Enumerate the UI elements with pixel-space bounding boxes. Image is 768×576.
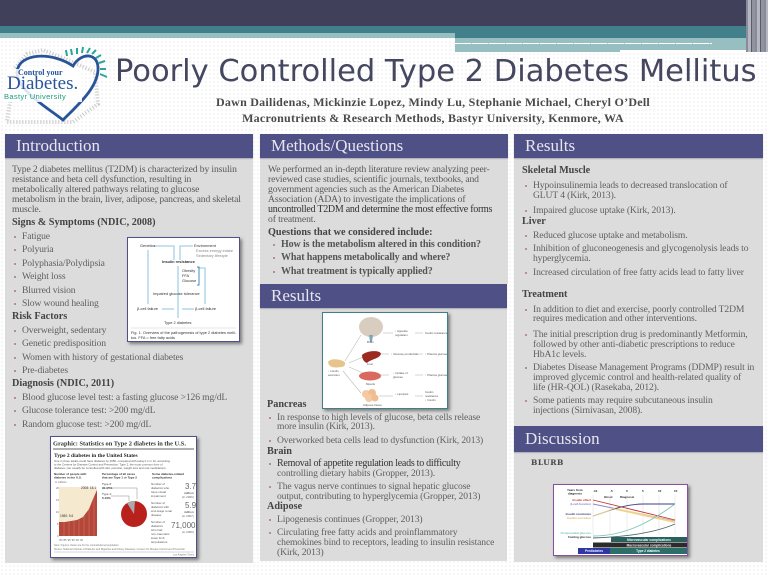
heading: liver: Liver — [522, 216, 546, 227]
list: adipose: Lipogenesis continues (Gropper, 2013) — [277, 514, 422, 525]
methods paragraph: uncontrolled T2DM and determine the most effective forms — [268, 204, 492, 214]
figure: natural history of type 2 diabetes: 0 — [626, 489, 628, 493]
figure: statistics on type 2 diabetes in the U.S.: Number of — [151, 501, 165, 505]
title: Poorly Controlled Type 2 Diabetes Mellitus — [115, 54, 757, 89]
figure: natural history of type 2 diabetes: Insulin resistance — [566, 512, 591, 516]
figure: statistics on type 2 diabetes in the U.S.: Los Angeles Times — [173, 554, 195, 556]
figure: organs affected by insulin deficiency: ↓ Uptake of — [393, 371, 408, 375]
list: questions — [273, 239, 481, 277]
figure: organs affected by insulin deficiency: Insulin resistance — [425, 331, 447, 335]
heading: Introduction: Introduction — [16, 136, 100, 155]
panel: discussion — [514, 426, 763, 562]
figure: organs affected by insulin deficiency: ↑ Lipolysis — [395, 392, 409, 396]
figure: statistics on type 2 diabetes in the U.S. — [50, 436, 197, 558]
figure: pathogenesis of type 2 diabetes — [127, 237, 240, 342]
panel: results (skeletal muscle, liver, treatment) — [514, 134, 763, 426]
figure: natural history of type 2 diabetes — [553, 484, 688, 556]
methods paragraph: reviewed case studies, scientific journals, textbooks, and — [268, 174, 479, 184]
list: questions: How is the metabolism altered in this condition? — [281, 239, 481, 250]
figure: statistics on type 2 diabetes in the U.S.: 10 — [56, 510, 59, 514]
heading: treatment: Treatment — [522, 289, 567, 300]
figure: statistics on type 2 diabetes in the U.S.: amputations — [151, 540, 168, 544]
list: treatment: In addition to diet and exercise, poorly controlled T2DM — [533, 304, 744, 314]
list: adipose: Circulating free fatty acids and proinflammatory — [277, 527, 457, 538]
list: pancreas: Overworked beta cells lead to dysfunction (Kirk, 2013) — [277, 435, 483, 446]
figure: statistics on type 2 diabetes in the U.S.: 90-95% — [102, 486, 113, 490]
figure: statistics on type 2 diabetes in the U.S.: million — [184, 510, 194, 514]
figure: natural history of type 2 diabetes: Diagnosis — [620, 495, 635, 499]
figure: statistics on type 2 diabetes in the U.S.: Type 1: — [102, 492, 112, 496]
intro paragraph: metabolism in the brain, liver, adipose, pancreas, and skeletal — [12, 194, 241, 204]
list: liver: hyperglycemia. — [533, 253, 591, 264]
methods paragraph: We performed an in-depth literature review analyzing peer- — [268, 164, 490, 174]
list: treatment: Diabetes Disease Management Programs (DDMP) result in — [533, 362, 754, 373]
figure: statistics on type 2 diabetes in the U.S.: In millions — [55, 480, 67, 484]
list: brain — [269, 458, 480, 502]
figure: statistics on type 2 diabetes in the U.S.: Graphic: Statistics on Type 2 diabetes in the U.S. — [53, 440, 186, 448]
figure: statistics on type 2 diabetes in the U.S.: diabetes, can usually be controlled with diet, exercise, weight loss and oral medications. — [54, 466, 167, 470]
figure: pathogenesis of type 2 diabetes: Obesity — [182, 268, 195, 273]
list: treatment — [525, 304, 754, 416]
list: risk factors — [14, 325, 183, 376]
figure: statistics on type 2 diabetes in the U.S.: Source: National Institute of Diabetes and Digestive and Kidney Diseases; Centers for Disease Control and Prevention — [54, 548, 186, 551]
list: treatment: life (HR-QOL) (Rasekaba, 2012). — [533, 382, 659, 393]
figure: organs affected by insulin deficiency: glucose — [393, 375, 403, 379]
figure: statistics on type 2 diabetes in the U.S.: 3.7 — [185, 482, 196, 491]
list: adipose: chemokines bind to receptors, leading to insulin resistance — [277, 537, 494, 548]
figure: statistics on type 2 diabetes in the U.S.: One in three adults could have diabetes by 2050, compared with today's 1 in 10, according — [54, 459, 170, 463]
list: risk factors: Women with history of gestational diabetes — [22, 352, 183, 363]
logo: Control your Diabetes heart — [4, 46, 108, 124]
list: skeletal muscle: GLUT 4 (Kirk, 2013). — [533, 190, 616, 201]
figure: organs affected by insulin deficiency: resistance — [425, 394, 439, 398]
figure: natural history of type 2 diabetes: 10 — [658, 489, 662, 493]
figure: statistics on type 2 diabetes in the U.S.: diabetics — [151, 524, 163, 528]
list: symptoms — [14, 231, 105, 309]
list: questions: What happens metabolically and where? — [281, 252, 450, 263]
figure: pathogenesis of type 2 diabetes: Glucose — [182, 278, 196, 283]
figure: statistics on type 2 diabetes in the U.S.: 20 — [56, 486, 59, 490]
figure: organs affected by insulin deficiency: Liver — [367, 362, 373, 366]
figure: organs affected by insulin deficiency: ↓ Insulin — [425, 398, 436, 402]
heading: Introduction — [5, 134, 253, 158]
figure: pathogenesis of type 2 diabetes: Insulin resistance — [162, 259, 196, 264]
figure: organs affected by insulin deficiency: regulation — [395, 333, 408, 337]
list: diagnosis — [14, 392, 227, 430]
figure: statistics on type 2 diabetes in the U.S.: non-traumatic — [151, 532, 170, 536]
list: pancreas: In response to high levels of glucose, beta cells release — [277, 412, 480, 422]
list: risk factors: Overweight, sedentary — [22, 325, 106, 336]
figure: statistics on type 2 diabetes in the U.S.: '80 '85 '90 '95 '00 '05 — [59, 538, 83, 542]
list: symptoms: Slow wound healing — [22, 298, 99, 309]
figure: natural history of type 2 diabetes: Years from — [567, 488, 583, 492]
heading: Discussion — [514, 426, 763, 452]
figure: natural history of type 2 diabetes: Type 2 diabetes — [636, 549, 660, 553]
figure: natural history of type 2 diabetes: 5 — [642, 489, 644, 493]
list: diagnosis: Glucose tolerance test: >200 mg/dL — [22, 405, 155, 416]
intro paragraph: metabolically altered pathways relating to glucose — [12, 184, 199, 194]
list: liver: Reduced glucose uptake and metabolism. — [533, 230, 688, 241]
heading: skeletal muscle: Skeletal Muscle — [522, 165, 590, 176]
logo: Control your Diabetes heart: Bastyr University — [4, 92, 66, 101]
figure: statistics on type 2 diabetes in the U.S.: complications — [152, 476, 173, 480]
list: symptoms: Weight loss — [22, 271, 65, 282]
heading: Discussion: Discussion — [525, 429, 600, 448]
list: diagnosis: Blood glucose level test: a fasting glucose >126 mg/dL — [22, 392, 227, 403]
panel: methods and questions — [260, 134, 508, 284]
figure: statistics on type 2 diabetes in the U.S.: Percentage of all cases — [102, 472, 136, 476]
figure: statistics on type 2 diabetes in the U.S.: 2008: 18.1 — [81, 486, 96, 490]
heading: risk factors: Risk Factors — [12, 311, 67, 322]
list: risk factors: Pre-diabetes — [22, 365, 68, 376]
list: skeletal muscle: Impaired glucose uptake (Kirk, 2013). — [533, 205, 676, 216]
figure: pathogenesis of type 2 diabetes: Sedentary lifestyle — [196, 253, 228, 258]
list: skeletal muscle — [525, 180, 728, 216]
figure: statistics on type 2 diabetes in the U.S.: to the Centers for Disease Control and Prevention. Type 2, the most common form of — [54, 462, 163, 466]
list: liver — [525, 230, 748, 278]
blurb text: BLURB — [531, 458, 564, 467]
list: risk factors: Genetic predisposition — [22, 338, 106, 349]
intro paragraph: muscle. — [12, 204, 41, 214]
figure: pathogenesis of type 2 diabetes: Genetics — [140, 243, 155, 248]
figure: statistics on type 2 diabetes in the U.S.: disease — [151, 513, 162, 517]
heading: pancreas: Pancreas — [267, 399, 306, 410]
figure: statistics on type 2 diabetes in the U.S.: Some diabetes-related — [152, 472, 184, 476]
figure: statistics on type 2 diabetes in the U.S.: (in 2007) — [182, 514, 194, 518]
figure: natural history of type 2 diabetes: -5 — [610, 489, 613, 493]
figure: natural history of type 2 diabetes: Insulin effect — [572, 498, 591, 502]
heading: brain: Brain — [267, 446, 292, 457]
figure: pathogenesis of type 2 diabetes: FFA — [182, 273, 190, 278]
figure: organs affected by insulin deficiency: secretion — [328, 373, 340, 377]
list: treatment: The initial prescription drug is predominantly Metformin, — [533, 329, 748, 340]
list: brain: controlling dietary habits (Gropper, 2013). — [277, 468, 435, 479]
figure: statistics on type 2 diabetes in the U.S.: 71,000 — [171, 521, 196, 530]
heading: Methods/Questions: Methods/Questions — [271, 136, 403, 155]
figure: organs affected by insulin deficiency: ↑ Plasma glucose — [425, 373, 447, 377]
figure: natural history of type 2 diabetes: Onset — [604, 495, 613, 499]
list: treatment: Some patients may require subcutaneous insulin — [533, 395, 713, 406]
figure: natural history of type 2 diabetes: Microvascular complications — [627, 538, 671, 542]
intro paragraph: Type 2 diabetes mellitus (T2DM) is characterized by insulin — [12, 164, 237, 174]
figure: statistics on type 2 diabetes in the U.S.: 15 — [56, 498, 59, 502]
figure: statistics on type 2 diabetes in the U.S.: 5 — [57, 522, 59, 526]
figure: organs affected by insulin deficiency: ↑ Appetite — [395, 329, 408, 333]
figure: natural history of type 2 diabetes: 15 — [674, 489, 678, 493]
figure: statistics on type 2 diabetes in the U.S.: 5.9 — [185, 501, 196, 510]
authors and affiliation: Dawn Dailidenas, Mickinzie Lopez, Mindy Lu, Stephanie Michael, Cheryl O’Dell — [216, 95, 650, 109]
authors and affiliation: Macronutrients & Research Methods, Bastyr University, Kenmore, WA — [242, 110, 624, 124]
figure: natural history of type 2 diabetes: diagnosis — [568, 492, 582, 496]
methods paragraph: government agencies such as the American Diabetes — [268, 184, 464, 194]
figure: statistics on type 2 diabetes in the U.S.: 0 — [57, 534, 59, 538]
figure: statistics on type 2 diabetes in the U.S.: have visual — [151, 490, 166, 494]
figure: statistics on type 2 diabetes in the U.S.: million — [184, 491, 194, 495]
list: brain: output, contributing to hyperglycemia (Gropper, 2013) — [277, 491, 480, 502]
figure: statistics on type 2 diabetes in the U.S.: 1980: 5.6 — [60, 514, 74, 518]
intro paragraph: resistance and beta cell dysfunction, resulting in — [12, 174, 191, 184]
figure: statistics on type 2 diabetes in the U.S.: diabetes in the U.S. — [54, 476, 82, 480]
list: treatment: HbA1c levels. — [533, 349, 586, 360]
figure: pathogenesis of type 2 diabetes: Environment — [194, 243, 217, 248]
panel: results (pancreas, brain, adipose) — [260, 284, 507, 561]
list: brain: Removal of appetite regulation leads to difficulty — [277, 458, 460, 469]
heading: Results — [260, 284, 507, 308]
heading: adipose: Adipose — [267, 501, 302, 512]
list: treatment: followed by other anti-diabetic prescriptions to reduce — [533, 339, 735, 350]
list: treatment: injections (Sirnivasan, 2008). — [533, 405, 642, 416]
list: treatment: requires medication and other interventions. — [533, 313, 697, 324]
logo: Control your Diabetes heart: Control your — [18, 68, 63, 77]
heading: Results: Results — [525, 136, 575, 155]
figure: statistics on type 2 diabetes in the U.S.: that are Type 1 or Type 2 — [102, 476, 137, 480]
figure: pathogenesis of type 2 diabetes: β-cell failure — [137, 306, 158, 311]
figure: organs affected by insulin deficiency: ↓ Insulin — [328, 369, 339, 373]
figure: statistics on type 2 diabetes in the U.S.: Type 2: — [102, 482, 112, 486]
methods paragraph — [268, 164, 492, 224]
figure: organs affected by insulin deficiency — [322, 312, 448, 409]
figure: statistics on type 2 diabetes in the U.S.: lower limb — [151, 536, 165, 540]
list: skeletal muscle: Hypoinsulinemia leads to decreased translocation of — [533, 180, 728, 191]
list: pancreas — [269, 412, 483, 446]
intro paragraph — [12, 164, 241, 214]
list: adipose — [269, 514, 494, 558]
figure: statistics on type 2 diabetes in the U.S.: Number of — [151, 520, 165, 524]
list: adipose: (Kirk, 2013) — [277, 547, 324, 558]
list: diagnosis: Random glucose test: >200 mg/dL — [22, 419, 151, 430]
panel: introduction — [5, 134, 253, 563]
figure: natural history of type 2 diabetes: Prediabetes — [585, 549, 603, 553]
heading: Results — [514, 134, 763, 158]
figure: statistics on type 2 diabetes in the U.S.: (in 2006) — [182, 495, 194, 499]
figure: organs affected by insulin deficiency: Insulin — [425, 390, 434, 394]
figure: natural history of type 2 diabetes: Postprandial glucose — [561, 531, 591, 535]
logo: Control your Diabetes heart: Diabetes. — [7, 73, 78, 94]
heading: signs and symptoms: Signs & Symptoms (NDIC, 2008) — [12, 217, 156, 228]
list: pancreas: more insulin (Kirk, 2013). — [277, 421, 375, 432]
heading: questions considered: Questions that we considered include: — [268, 227, 433, 238]
list: liver: Increased circulation of free fatty acids lead to fatty liver — [533, 267, 744, 278]
figure: statistics on type 2 diabetes in the U.S.: diabetics with — [151, 505, 169, 509]
figure: statistics on type 2 diabetes in the U.S.: impairment — [151, 494, 166, 498]
top banner — [0, 0, 768, 52]
figure: natural history of type 2 diabetes: Fasting glucose — [568, 535, 591, 539]
list: symptoms: Fatigue — [22, 231, 50, 242]
list: symptoms: Polyuria — [22, 244, 54, 255]
figure: organs affected by insulin deficiency: ↑ Glucose production — [391, 352, 419, 356]
methods paragraph: of treatment. — [268, 214, 316, 224]
figure: statistics on type 2 diabetes in the U.S.: Number of people with — [54, 472, 87, 476]
figure: organs affected by insulin deficiency: Adipose tissue — [363, 403, 382, 407]
figure: pathogenesis of type 2 diabetes: tus. FFA = free fatty acids — [131, 335, 175, 340]
figure: statistics on type 2 diabetes in the U.S.: diabetics who — [151, 486, 170, 490]
heading: Results: Results — [271, 286, 321, 305]
heading: Methods/Questions — [260, 134, 508, 158]
figure: organs affected by insulin deficiency: Brain — [367, 340, 374, 344]
list: brain: The vagus nerve continues to signal hepatic glucose — [277, 481, 470, 492]
authors and affiliation — [216, 95, 650, 124]
figure: pathogenesis of type 2 diabetes: Excess energy intake — [196, 248, 233, 253]
figure: natural history of type 2 diabetes: Macrovascular complications — [627, 543, 672, 547]
figure: pathogenesis of type 2 diabetes: Impaired glucose tolerance — [153, 291, 200, 296]
figure: natural history of type 2 diabetes: -10 — [593, 489, 598, 493]
list: symptoms: Polyphasia/Polydipsia — [22, 258, 105, 269]
figure: statistics on type 2 diabetes in the U.S.: Type 2 diabetes in the United States — [54, 453, 138, 459]
list: treatment: improved glycemic control and health-related quality of — [533, 372, 741, 383]
list: liver: Inhibition of gluconeogenesis and glycogenolysis leads to — [533, 243, 748, 254]
list: symptoms: Blurred vision — [22, 285, 75, 296]
figure: pathogenesis of type 2 diabetes: Fig. 1. Overview of the pathogenesis of type 2 diabetes melli- — [131, 330, 237, 335]
heading: diagnosis: Diagnosis (NDIC, 2011) — [12, 378, 114, 389]
figure: statistics on type 2 diabetes in the U.S.: 5-10% — [102, 496, 111, 500]
list: questions: What treatment is typically applied? — [281, 266, 433, 277]
figure: pathogenesis of type 2 diabetes: β-cell failure — [195, 306, 216, 311]
figure: statistics on type 2 diabetes in the U.S.: Note: Figures shown are for the noninstitutional population — [54, 544, 119, 547]
figure: pathogenesis of type 2 diabetes: Type 2 diabetes — [164, 320, 192, 325]
figure: natural history of type 2 diabetes: Insulin secretion — [567, 516, 591, 520]
figure: organs affected by insulin deficiency: Muscle — [366, 382, 376, 386]
methods paragraph: Association (ADA) to investigate the implications of — [268, 194, 465, 204]
figure: natural history of type 2 diabetes: β-cell function — [570, 502, 591, 506]
figure: statistics on type 2 diabetes in the U.S.: end-stage renal — [151, 509, 172, 513]
figure: statistics on type 2 diabetes in the U.S.: Number of — [151, 482, 165, 486]
figure: statistics on type 2 diabetes in the U.S.: who had — [151, 528, 163, 532]
figure: statistics on type 2 diabetes in the U.S.: (in 2006) — [182, 530, 194, 534]
figure: organs affected by insulin deficiency: ↑ Plasma glucose — [425, 352, 447, 356]
